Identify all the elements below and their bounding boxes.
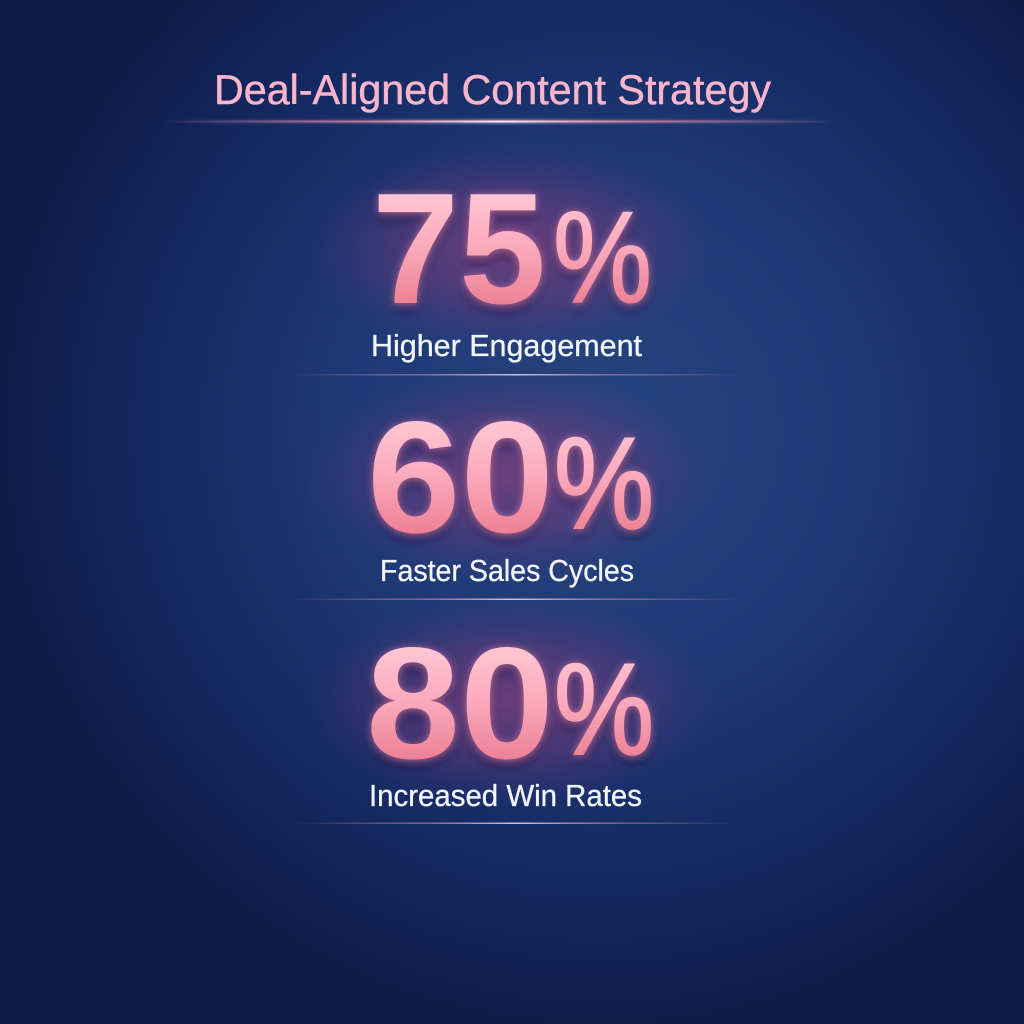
label: Higher Engagement: Higher Engagement [371, 328, 642, 363]
number 75%: 75 [372, 161, 546, 337]
number 75%: % [553, 184, 652, 330]
number 80%: % [554, 636, 654, 782]
number 80% [366, 614, 654, 792]
number 60%: 60 [367, 388, 554, 566]
label: Increased Win Rates: Increased Win Rates [369, 778, 642, 813]
title divider [160, 119, 840, 124]
title: Deal-Aligned Content Strategy [214, 66, 771, 113]
stat: 80% increased win rates [305, 597, 715, 813]
number 60% [367, 388, 654, 566]
glow behind 60% [305, 371, 715, 581]
stat: 60% faster sales cycles [305, 371, 715, 588]
glow behind 75% [305, 143, 715, 353]
number 75% [372, 161, 652, 337]
stat: 75% higher engagement [305, 143, 715, 363]
number 60%: % [554, 410, 654, 556]
glow behind 80% [305, 597, 715, 807]
number 80%: 80 [366, 614, 554, 792]
label: Faster Sales Cycles: Faster Sales Cycles [380, 553, 634, 588]
